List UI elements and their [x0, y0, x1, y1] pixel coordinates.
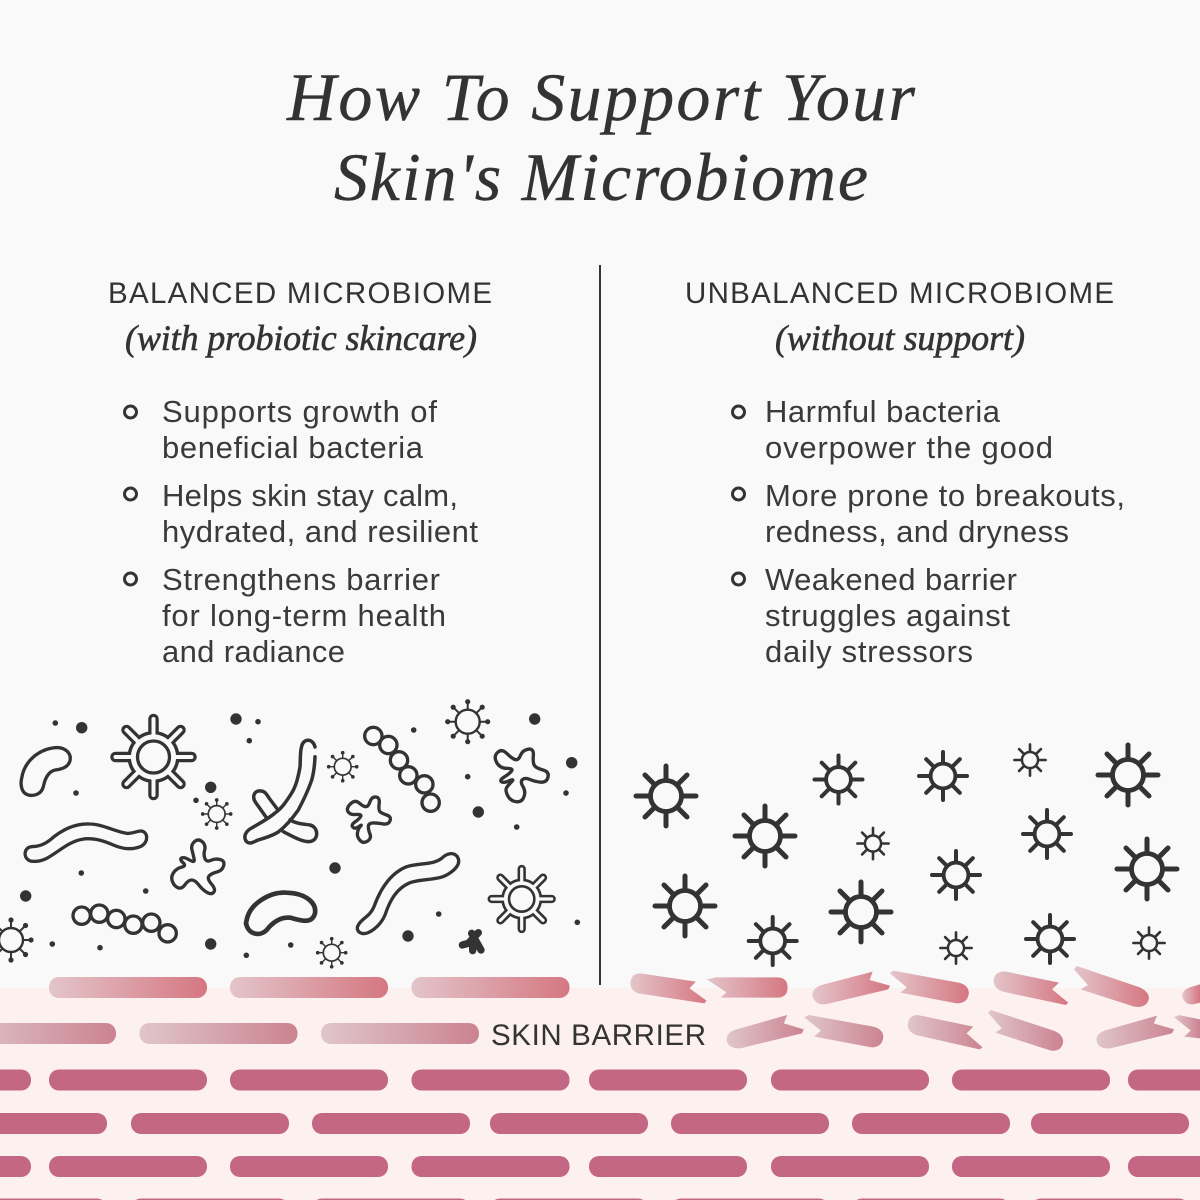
- panel heading: unbalanced microbiome: UNBALANCED MICROBIOME: [685, 277, 1114, 310]
- skin barrier background band: [0, 988, 1200, 1200]
- dots scattered: [20, 713, 580, 958]
- panel heading: balanced microbiome: BALANCED MICROBIOME: [108, 277, 492, 310]
- effects list: unbalanced: Weakened barrier: [765, 562, 1017, 597]
- title: [286, 59, 916, 215]
- benefits list: balanced: Helps skin stay calm,: [162, 478, 458, 513]
- benefits list: balanced: and radiance: [162, 634, 345, 669]
- effects list: unbalanced: More prone to breakouts,: [765, 478, 1125, 513]
- title: How To Support Your: [286, 59, 916, 135]
- panel heading: unbalanced microbiome: (without support): [775, 318, 1025, 358]
- benefits list: balanced: hydrated, and resilient: [162, 514, 478, 549]
- title: Skin's Microbiome: [334, 139, 868, 215]
- benefits list: balanced: Strengthens barrier: [162, 562, 440, 597]
- bacteria right zone: [357, 727, 481, 951]
- effects list: unbalanced: overpower the good: [765, 430, 1053, 465]
- effects list: unbalanced: redness, and dryness: [765, 514, 1069, 549]
- spiked viruses: [0, 699, 490, 969]
- medium gear microbe: [492, 869, 552, 929]
- effects list: unbalanced: struggles against: [765, 598, 1010, 633]
- large gear microbe: [116, 719, 192, 795]
- broken barrier cells: [630, 966, 1200, 1051]
- amoeba bacteria upper: [347, 749, 548, 842]
- benefits list: balanced: for long-term health: [162, 598, 446, 633]
- benefits list: balanced: Supports growth of: [162, 394, 437, 429]
- effects list: unbalanced: Harmful bacteria: [765, 394, 1001, 429]
- crossed rod bacteria: [245, 740, 317, 843]
- effects list: unbalanced: daily stressors: [765, 634, 973, 669]
- skin barrier label: SKIN BARRIER: [491, 1019, 706, 1052]
- illustration: balanced microbes: [0, 699, 580, 969]
- bacteria left zone: [21, 748, 315, 942]
- panel heading: balanced microbiome: [108, 277, 492, 358]
- healthy skin barrier rows: [0, 1070, 1200, 1200]
- panel heading: balanced microbiome: (with probiotic skincare): [125, 318, 477, 358]
- intact barrier top rows: [0, 977, 570, 1044]
- benefits list: balanced: beneficial bacteria: [162, 430, 424, 465]
- illustration: unbalanced microbes: [636, 744, 1177, 965]
- benefits list: balanced: [124, 394, 478, 669]
- center divider: [599, 265, 601, 985]
- panel heading: unbalanced microbiome: [685, 277, 1114, 358]
- effects list: unbalanced: [732, 394, 1125, 669]
- amoeba bacteria lower left: [172, 840, 224, 894]
